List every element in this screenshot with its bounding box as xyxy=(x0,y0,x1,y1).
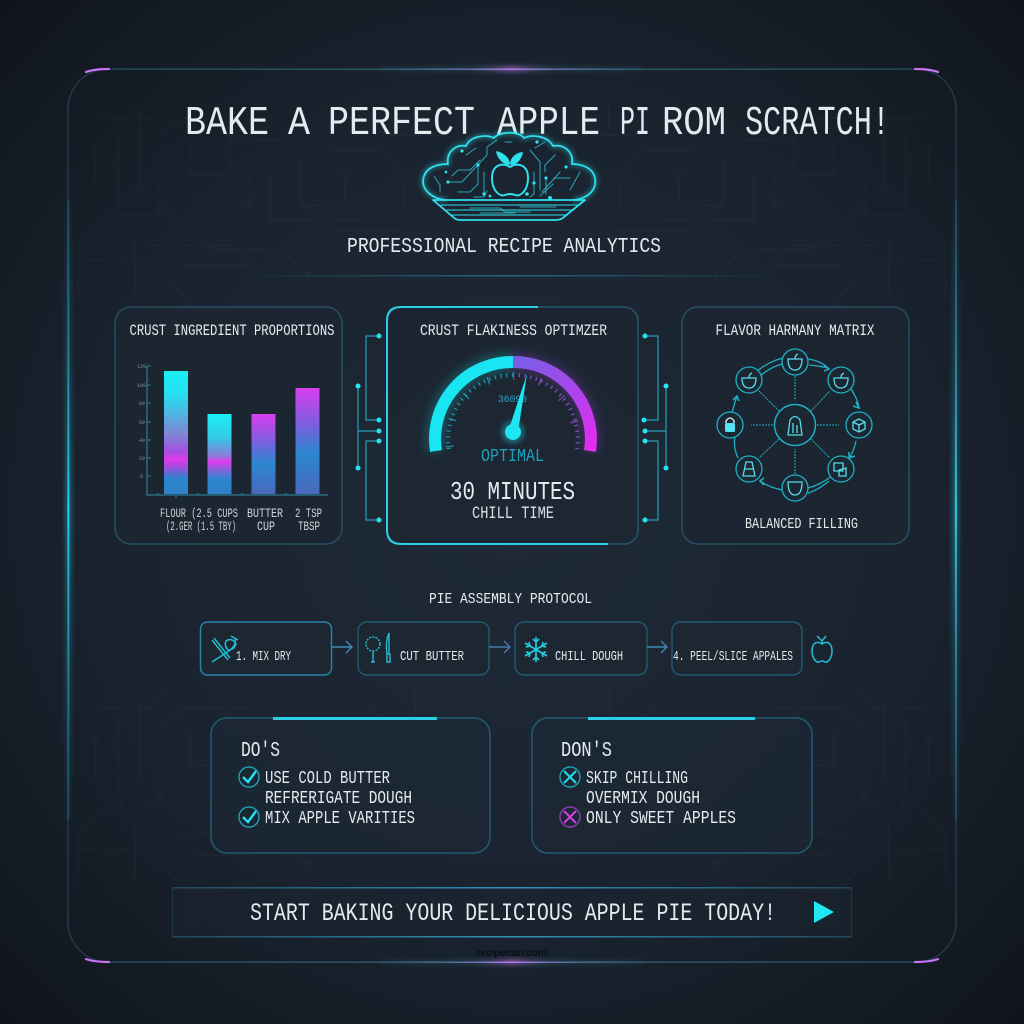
gauge xyxy=(435,362,591,467)
chill time label: CHILL TIME xyxy=(472,504,554,524)
title: PI xyxy=(620,101,650,147)
right node: cube xyxy=(846,412,872,438)
icon: cross xyxy=(560,767,580,787)
arrow xyxy=(647,641,667,653)
step 4: peel and slice apples xyxy=(672,622,802,675)
title: PERFECT xyxy=(328,101,475,147)
step 2: cut butter xyxy=(358,622,489,675)
bar chart: 120 xyxy=(137,364,146,370)
call to action banner: START BAKING YOUR DELICIOUS APPLE PIE TODAY! xyxy=(250,899,776,928)
icon: pastry cutter and knife xyxy=(366,633,390,662)
panel: crust ingredient proportions xyxy=(115,307,342,544)
step 1: mix dry: 1. MIX DRY xyxy=(236,649,291,665)
bar chart xyxy=(137,364,328,498)
title: SCRATCH! xyxy=(745,101,890,147)
bar labels: BUTTER xyxy=(247,506,283,521)
panel heading: CRUST INGREDIENT PROPORTIONS xyxy=(130,322,334,340)
bar chart: 100 xyxy=(137,383,146,389)
lower right node: cubes xyxy=(828,456,854,482)
don'ts list: ONLY SWEET APPLES xyxy=(586,809,736,829)
heading: DON'S xyxy=(561,740,612,763)
icon: check xyxy=(239,767,259,787)
bar chart: 20 xyxy=(139,456,145,462)
gauge value: 36090 xyxy=(498,395,527,406)
bar chart: 80 xyxy=(139,401,145,407)
bar chart: 40 xyxy=(139,438,145,444)
do's list: REFRERIGATE DOUGH xyxy=(265,789,412,809)
left node: lock xyxy=(717,412,743,438)
icon: check xyxy=(239,807,259,827)
icon: play arrow xyxy=(814,901,834,923)
title xyxy=(185,101,890,147)
bar labels: (2.GER (1.5 TBY) xyxy=(166,519,236,534)
bar labels xyxy=(160,506,322,534)
section heading: pie assembly protocol: PIE ASSEMBLY PROTOCOL xyxy=(429,592,592,608)
arrow xyxy=(489,641,510,653)
icon: cross xyxy=(560,807,580,827)
icon: circuit pie with apple xyxy=(423,133,595,220)
bar labels: 2 TSP xyxy=(295,506,322,521)
icon: apple outline xyxy=(812,636,832,662)
bar labels: TBSP xyxy=(298,519,320,534)
step 1: mix dry xyxy=(200,622,332,675)
top node: apple xyxy=(782,349,808,375)
bar labels: CUP xyxy=(257,519,275,534)
flavor network diagram xyxy=(717,349,872,501)
panel: don'ts xyxy=(532,717,812,853)
step 3: chill dough: CHILL DOUGH xyxy=(555,649,623,665)
don'ts list xyxy=(586,769,736,829)
call to action banner xyxy=(172,887,852,938)
arrow xyxy=(332,641,352,653)
panel: crust flakiness optimizer xyxy=(387,307,638,544)
network caption: BALANCED FILLING xyxy=(745,516,858,533)
gauge ticks xyxy=(448,375,578,449)
don'ts list: OVERMIX DOUGH xyxy=(586,789,700,809)
chill time value: 30 MINUTES xyxy=(450,477,575,507)
bottom node: apple xyxy=(782,475,808,501)
panel: flavor harmony matrix xyxy=(682,307,909,544)
icon: whisk xyxy=(212,636,238,662)
step 3: chill dough xyxy=(515,622,647,675)
do's list: MIX APPLE VARITIES xyxy=(265,809,415,829)
icon: snowflake xyxy=(525,637,547,662)
do's list xyxy=(265,769,415,829)
title: ROM xyxy=(662,101,726,147)
footer credit: recipecan.com xyxy=(477,948,547,959)
panel: do's xyxy=(211,717,490,853)
connectors right xyxy=(642,334,668,522)
bar chart: 60 xyxy=(139,420,145,426)
don'ts list: SKIP CHILLING xyxy=(586,769,688,789)
gauge needle xyxy=(501,374,527,444)
title: BAKE xyxy=(185,101,269,147)
lower left node: jar xyxy=(736,456,762,482)
upper left node: apple xyxy=(736,367,762,393)
do's list: USE COLD BUTTER xyxy=(265,769,390,789)
bar labels: FLOUR (2.5 CUPS xyxy=(160,506,238,521)
panel heading: FLAVOR HARMANY MATRIX xyxy=(716,322,875,340)
title: APPLE xyxy=(497,101,600,147)
step 4: peel and slice apples: 4. PEEL/SLICE APPALES xyxy=(673,649,793,665)
subtitle: PROFESSIONAL RECIPE ANALYTICS xyxy=(347,236,661,259)
heading: DO'S xyxy=(241,740,280,763)
upper right node: apple xyxy=(828,367,854,393)
panel heading: CRUST FLAKINESS OPTIMZER xyxy=(420,322,607,340)
bar chart: 0 xyxy=(140,474,143,480)
gauge status: OPTIMAL xyxy=(481,447,544,467)
outer frame xyxy=(65,66,959,965)
step 2: cut butter: CUT BUTTER xyxy=(400,649,464,665)
title: A xyxy=(288,101,310,147)
connectors left xyxy=(356,334,382,522)
center node: shaker xyxy=(774,404,816,446)
circuit board background pattern xyxy=(78,98,946,923)
